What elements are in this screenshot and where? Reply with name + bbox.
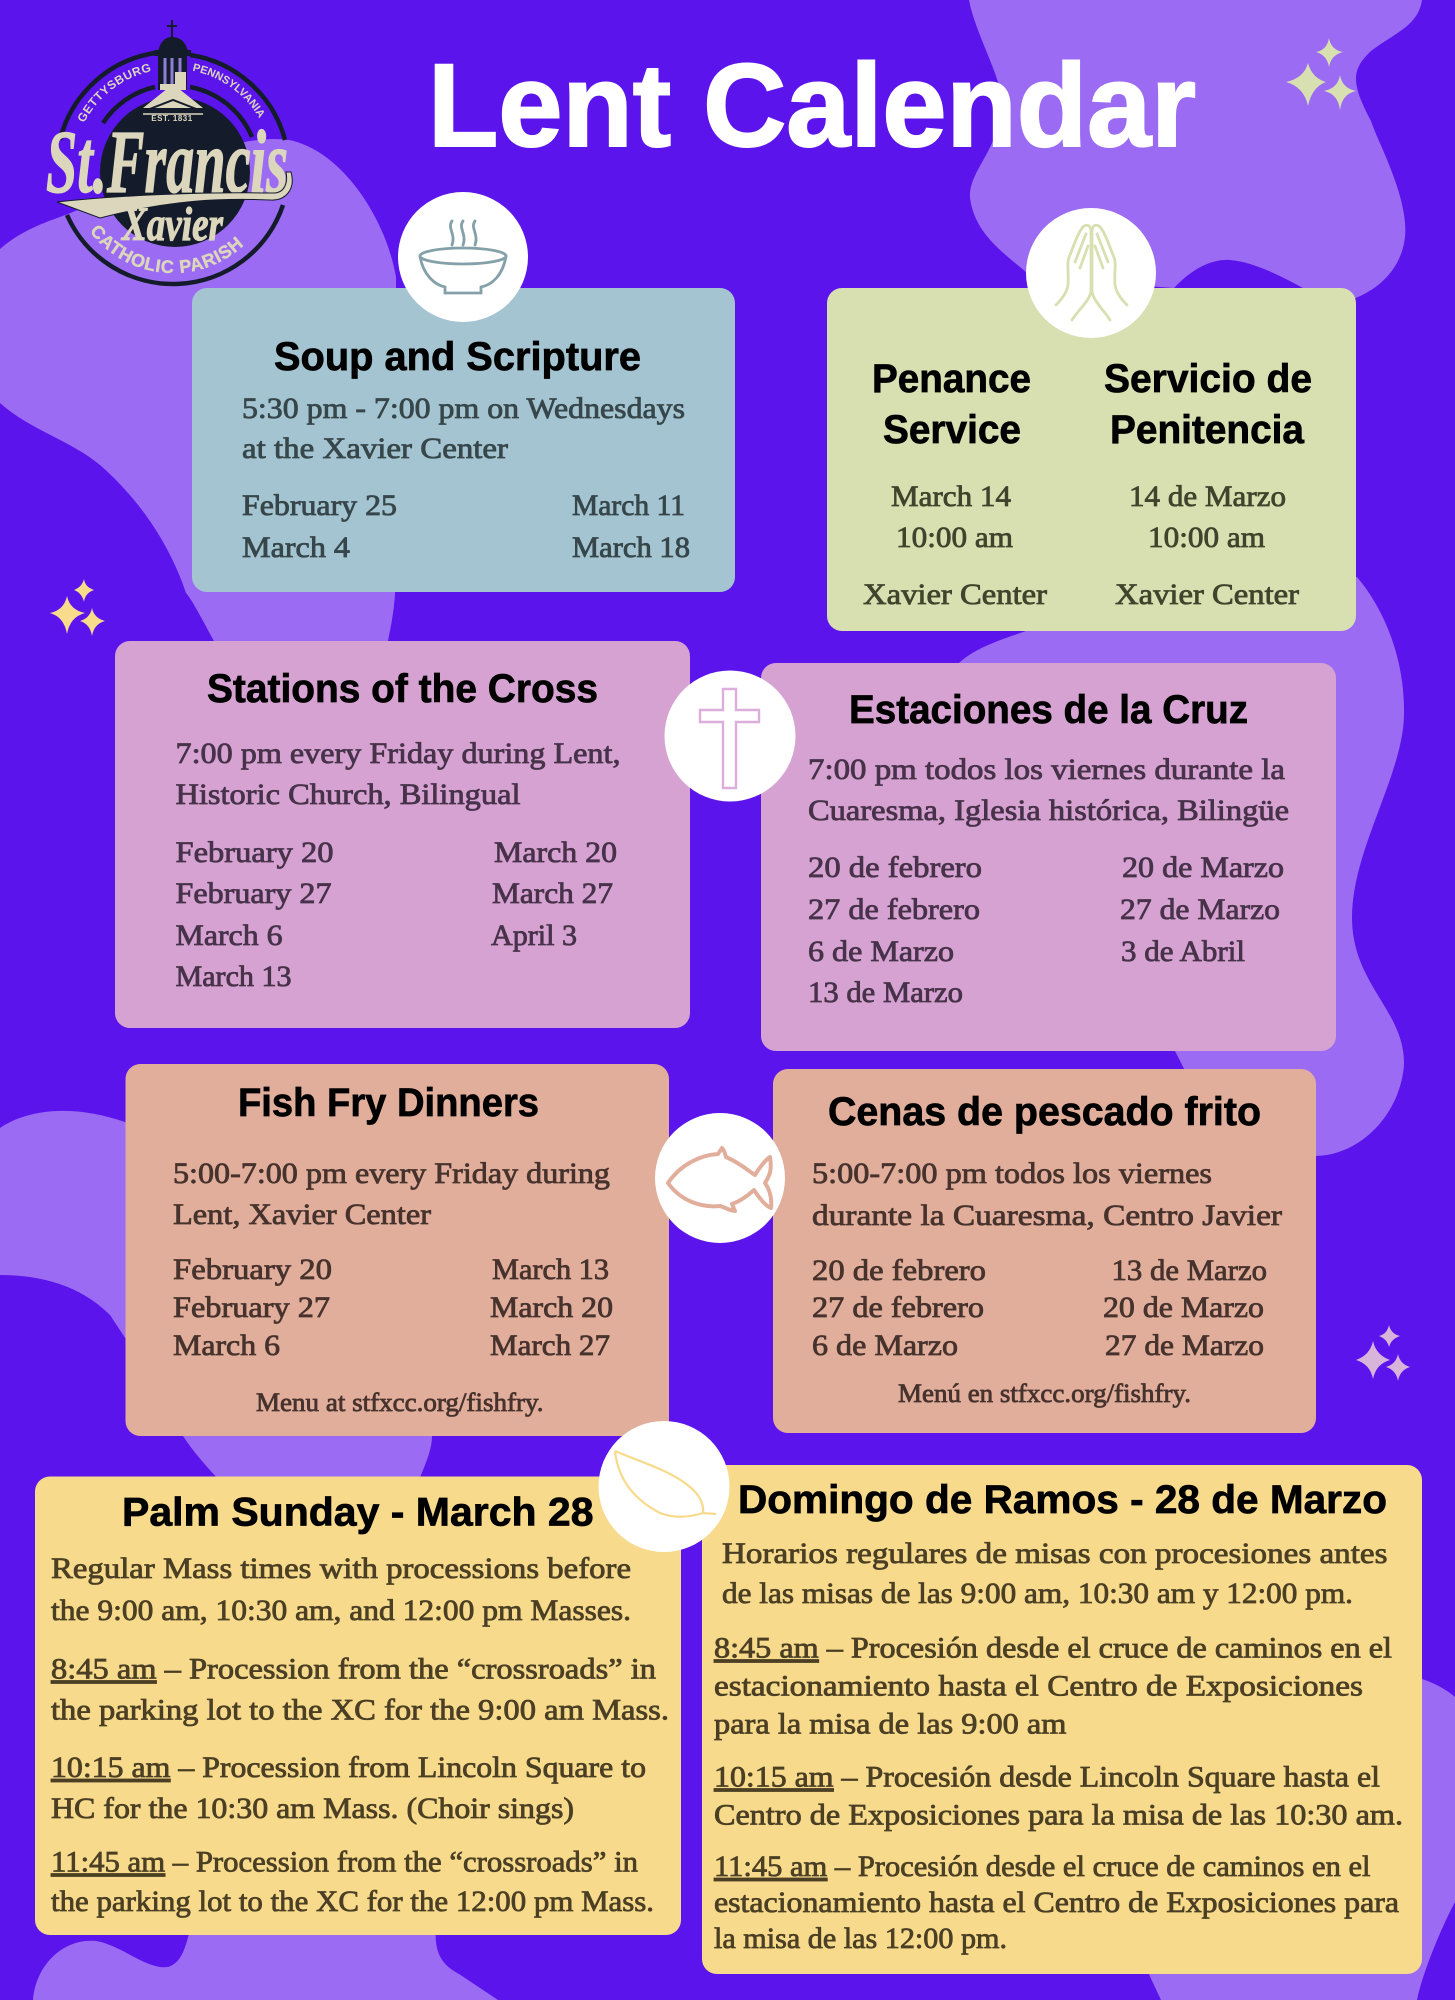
procession 8:45 [714, 1632, 1392, 1740]
schedule text [173, 1157, 610, 1231]
procession 8:45: 8:45 am – Procession from the “crossroads” in [51, 1652, 656, 1686]
dates: 20 de febrero [812, 1254, 986, 1287]
dates [808, 851, 1284, 1009]
heading: Estaciones de la Cruz [849, 688, 1248, 732]
procession 10:15: 10:15 am – Procesión desde Lincoln Square hasta el [714, 1760, 1380, 1794]
details: English: Xavier Center [863, 578, 1047, 611]
dates: March 20 [494, 836, 617, 869]
procession 11:45: 11:45 am – Procesión desde el cruce de caminos en el [714, 1850, 1370, 1883]
dates: March 27 [490, 1329, 610, 1362]
dates: 20 de Marzo [1103, 1291, 1264, 1324]
dates: February 20 [176, 836, 334, 869]
icon: sparkles lower right [1356, 1325, 1410, 1381]
dates: March 20 [490, 1291, 613, 1324]
logo established date: EST. 1831 [151, 114, 193, 123]
heading: Stations of the Cross [207, 667, 598, 711]
schedule text [808, 753, 1289, 827]
schedule text [812, 1157, 1282, 1232]
schedule text: durante la Cuaresma, Centro Javier [812, 1199, 1282, 1232]
procession 8:45: the parking lot to the XC for the 9:00 am Mass. [51, 1694, 669, 1726]
schedule text: Lent, Xavier Center [173, 1198, 431, 1231]
dates: 6 de Marzo [808, 935, 954, 968]
logo script: St. Francis: St.Francis [46, 113, 288, 212]
heading: Spanish: Servicio de [1104, 357, 1312, 401]
dates [242, 489, 690, 564]
heading: Cenas de pescado frito [828, 1090, 1261, 1134]
details: English [863, 480, 1047, 611]
details: English: 10:00 am [896, 521, 1013, 554]
heading: Domingo de Ramos - 28 de Marzo [738, 1478, 1387, 1522]
heading: Spanish: Penitencia [1110, 408, 1305, 452]
dates: 6 de Marzo [812, 1329, 958, 1362]
menu link note: Menú en stfxcc.org/fishfry. [898, 1379, 1191, 1408]
dates: February 27 [173, 1291, 330, 1324]
procession 11:45: la misa de las 12:00 pm. [714, 1922, 1007, 1955]
procession 11:45: the parking lot to the XC for the 12:00 pm Mass. [51, 1885, 654, 1918]
icon: fish [655, 1113, 785, 1243]
dates [176, 836, 617, 993]
dates: 13 de Marzo [808, 976, 963, 1009]
icon: cross [664, 670, 796, 802]
panel: penance service [827, 288, 1356, 631]
parish logo [46, 20, 293, 286]
details: Spanish [1115, 480, 1299, 611]
title: Lent Calendar [428, 40, 1196, 172]
dates: February 27 [176, 877, 332, 910]
details: Spanish: Xavier Center [1115, 578, 1299, 611]
panel: stations of the cross [115, 641, 690, 1028]
details: Spanish: 14 de Marzo [1129, 480, 1286, 513]
dates: February 25 [242, 489, 397, 522]
intro text: the 9:00 am, 10:30 am, and 12:00 pm Masses. [51, 1594, 631, 1627]
procession 11:45: 11:45 am – Procession from the “crossroads” in [51, 1846, 638, 1878]
dates: March 18 [572, 531, 690, 564]
dates: 3 de Abril [1121, 935, 1245, 968]
procession 8:45: 8:45 am – Procesión desde el cruce de caminos en el [714, 1632, 1392, 1664]
dates: March 4 [242, 531, 350, 564]
logo ring text: Gettysburg: GETTYSBURG [78, 64, 150, 122]
dates: March 13 [492, 1253, 609, 1286]
heading: English [872, 357, 1031, 452]
dates: 13 de Marzo [1112, 1254, 1267, 1287]
dates: April 3 [491, 919, 577, 952]
dates: 27 de Marzo [1105, 1329, 1264, 1362]
icon: palm leaf [598, 1421, 730, 1552]
icon: soup bowl [398, 192, 528, 322]
dates: March 6 [173, 1329, 280, 1362]
procession 11:45: estacionamiento hasta el Centro de Exposiciones para [714, 1886, 1399, 1919]
schedule text: 7:00 pm todos los viernes durante la [808, 753, 1285, 786]
dates: March 27 [492, 877, 613, 910]
heading: English: Service [883, 408, 1021, 452]
panel: estaciones de la cruz [761, 663, 1336, 1051]
schedule text: 5:00-7:00 pm every Friday during [173, 1157, 610, 1190]
heading: English: Penance [872, 357, 1031, 401]
schedule text [176, 737, 620, 811]
details: Spanish: 10:00 am [1148, 521, 1265, 554]
dates: March 13 [176, 960, 292, 993]
intro text [51, 1552, 631, 1627]
intro text: Horarios regulares de misas con procesiones antes [722, 1537, 1388, 1570]
procession 8:45: estacionamiento hasta el Centro de Exposiciones [714, 1670, 1363, 1702]
schedule text: Cuaresma, Iglesia histórica, Bilingüe [808, 794, 1289, 827]
procession 10:15: 10:15 am – Procession from Lincoln Square to [51, 1751, 646, 1784]
dates: 27 de Marzo [1120, 893, 1280, 926]
menu link note: Menu at stfxcc.org/fishfry. [256, 1388, 544, 1417]
dates: 27 de febrero [808, 893, 980, 926]
intro text: de las misas de las 9:00 am, 10:30 am y 12:00 pm. [722, 1577, 1353, 1610]
dates: March 6 [176, 919, 282, 952]
dates: February 20 [173, 1253, 332, 1286]
procession 11:45 [51, 1846, 654, 1918]
dates [173, 1253, 613, 1362]
procession 10:15 [714, 1760, 1403, 1832]
logo ring text: Pennsylvania: PENNSYLVANIA [193, 63, 264, 118]
procession 10:15: HC for the 10:30 am Mass. (Choir sings) [51, 1792, 574, 1825]
schedule text: Historic Church, Bilingual [176, 778, 520, 811]
schedule text: 5:30 pm - 7:00 pm on Wednesdays [242, 392, 685, 425]
procession 10:15: Centro de Exposiciones para la misa de las 10:30 am. [714, 1798, 1403, 1832]
logo ring text: Catholic Parish: CATHOLIC PARISH [92, 226, 244, 274]
dates: March 11 [572, 489, 685, 522]
panel: soup and scripture [192, 288, 735, 592]
heading: Fish Fry Dinners [238, 1081, 539, 1125]
procession 10:15 [51, 1751, 646, 1825]
heading: Spanish [1104, 357, 1312, 452]
heading: Palm Sunday - March 28 [122, 1490, 594, 1534]
schedule text: at the Xavier Center [242, 432, 508, 465]
panel: domingo de ramos [702, 1465, 1422, 1974]
panel: palm sunday [35, 1476, 681, 1935]
panel: fish fry dinners [126, 1064, 669, 1436]
schedule text: 7:00 pm every Friday during Lent, [176, 737, 620, 770]
icon: sparkles left [50, 579, 105, 636]
icon: praying hands [1026, 208, 1156, 338]
procession 8:45: para la misa de las 9:00 am [714, 1708, 1066, 1740]
details: English: March 14 [891, 480, 1011, 513]
procession 11:45 [714, 1850, 1399, 1955]
procession 8:45 [51, 1652, 669, 1726]
heading: Soup and Scripture [274, 335, 641, 379]
dates: 20 de febrero [808, 851, 982, 884]
logo script: Xavier: Xavier [120, 198, 224, 251]
intro text [722, 1537, 1388, 1610]
dates: 20 de Marzo [1122, 851, 1284, 884]
icon: sparkles top right [1286, 38, 1356, 110]
dates [812, 1254, 1267, 1362]
dates: 27 de febrero [812, 1291, 984, 1324]
schedule text: 5:00-7:00 pm todos los viernes [812, 1157, 1212, 1190]
intro text: Regular Mass times with processions before [51, 1552, 631, 1585]
panel: cenas de pescado frito [773, 1069, 1316, 1433]
schedule text [242, 392, 685, 465]
